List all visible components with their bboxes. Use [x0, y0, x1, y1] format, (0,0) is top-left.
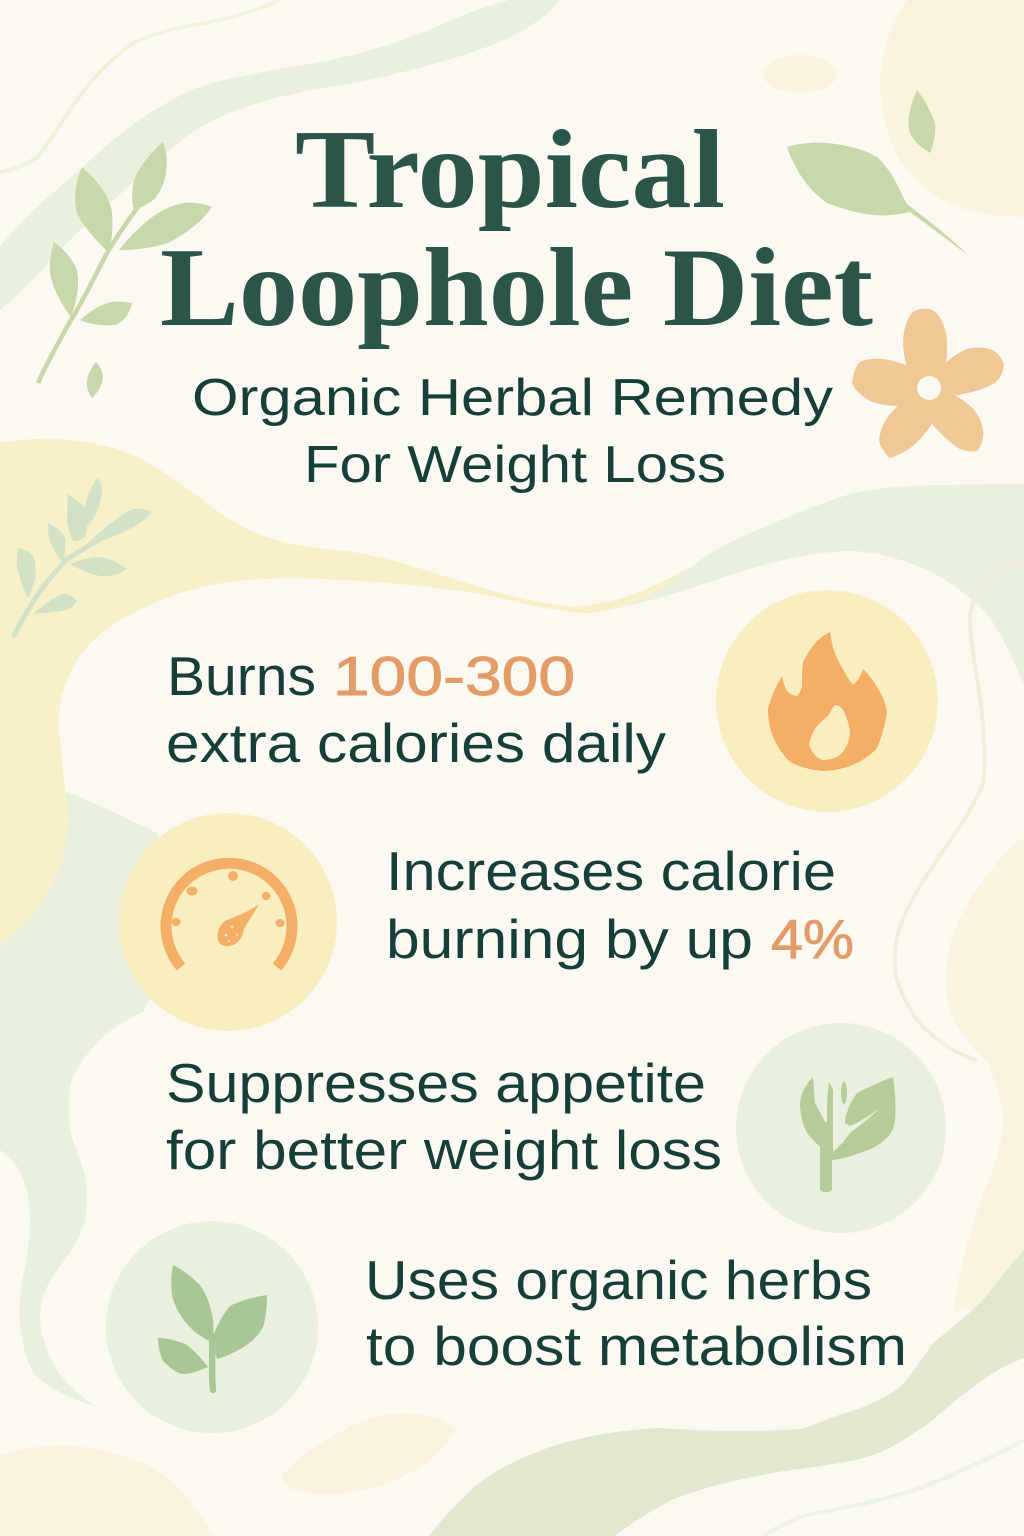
subtitle: For Weight Loss	[304, 436, 726, 494]
benefit 2 text	[386, 840, 854, 970]
subtitle: Organic Herbal Remedy	[192, 369, 833, 427]
icon: seedling	[106, 1221, 318, 1433]
title	[160, 108, 873, 350]
benefit 1 text	[166, 645, 667, 774]
icon: flower	[853, 310, 1003, 457]
benefit 3 text: for better weight loss	[166, 1119, 722, 1181]
title: Tropical	[295, 108, 725, 232]
subtitle	[192, 369, 833, 494]
benefit 4 text: to boost metabolism	[366, 1315, 907, 1377]
benefit 4 text: Uses organic herbs	[365, 1249, 872, 1311]
icon: gauge	[119, 813, 337, 1031]
icon: top right leaf	[787, 90, 968, 255]
icon: flame	[716, 590, 938, 812]
benefit 1 text: extra calories daily	[166, 712, 667, 774]
icon: fork and leaf	[736, 1023, 946, 1233]
benefit 3 text: Suppresses appetite	[166, 1052, 706, 1114]
icon: faded leaf sprig	[13, 478, 152, 637]
benefit 4 text	[365, 1249, 907, 1377]
benefit 1 text: 100-300	[333, 645, 575, 707]
benefit 1 text: Burns	[167, 645, 316, 707]
benefit 2 text: 4%	[771, 908, 854, 970]
benefit 2 text: burning by up	[386, 908, 753, 970]
icon: top left leaf sprig	[38, 142, 212, 398]
benefit 2 text: Increases calorie	[386, 840, 836, 902]
title: Loophole Diet	[160, 226, 873, 350]
benefit 3 text	[166, 1052, 722, 1181]
